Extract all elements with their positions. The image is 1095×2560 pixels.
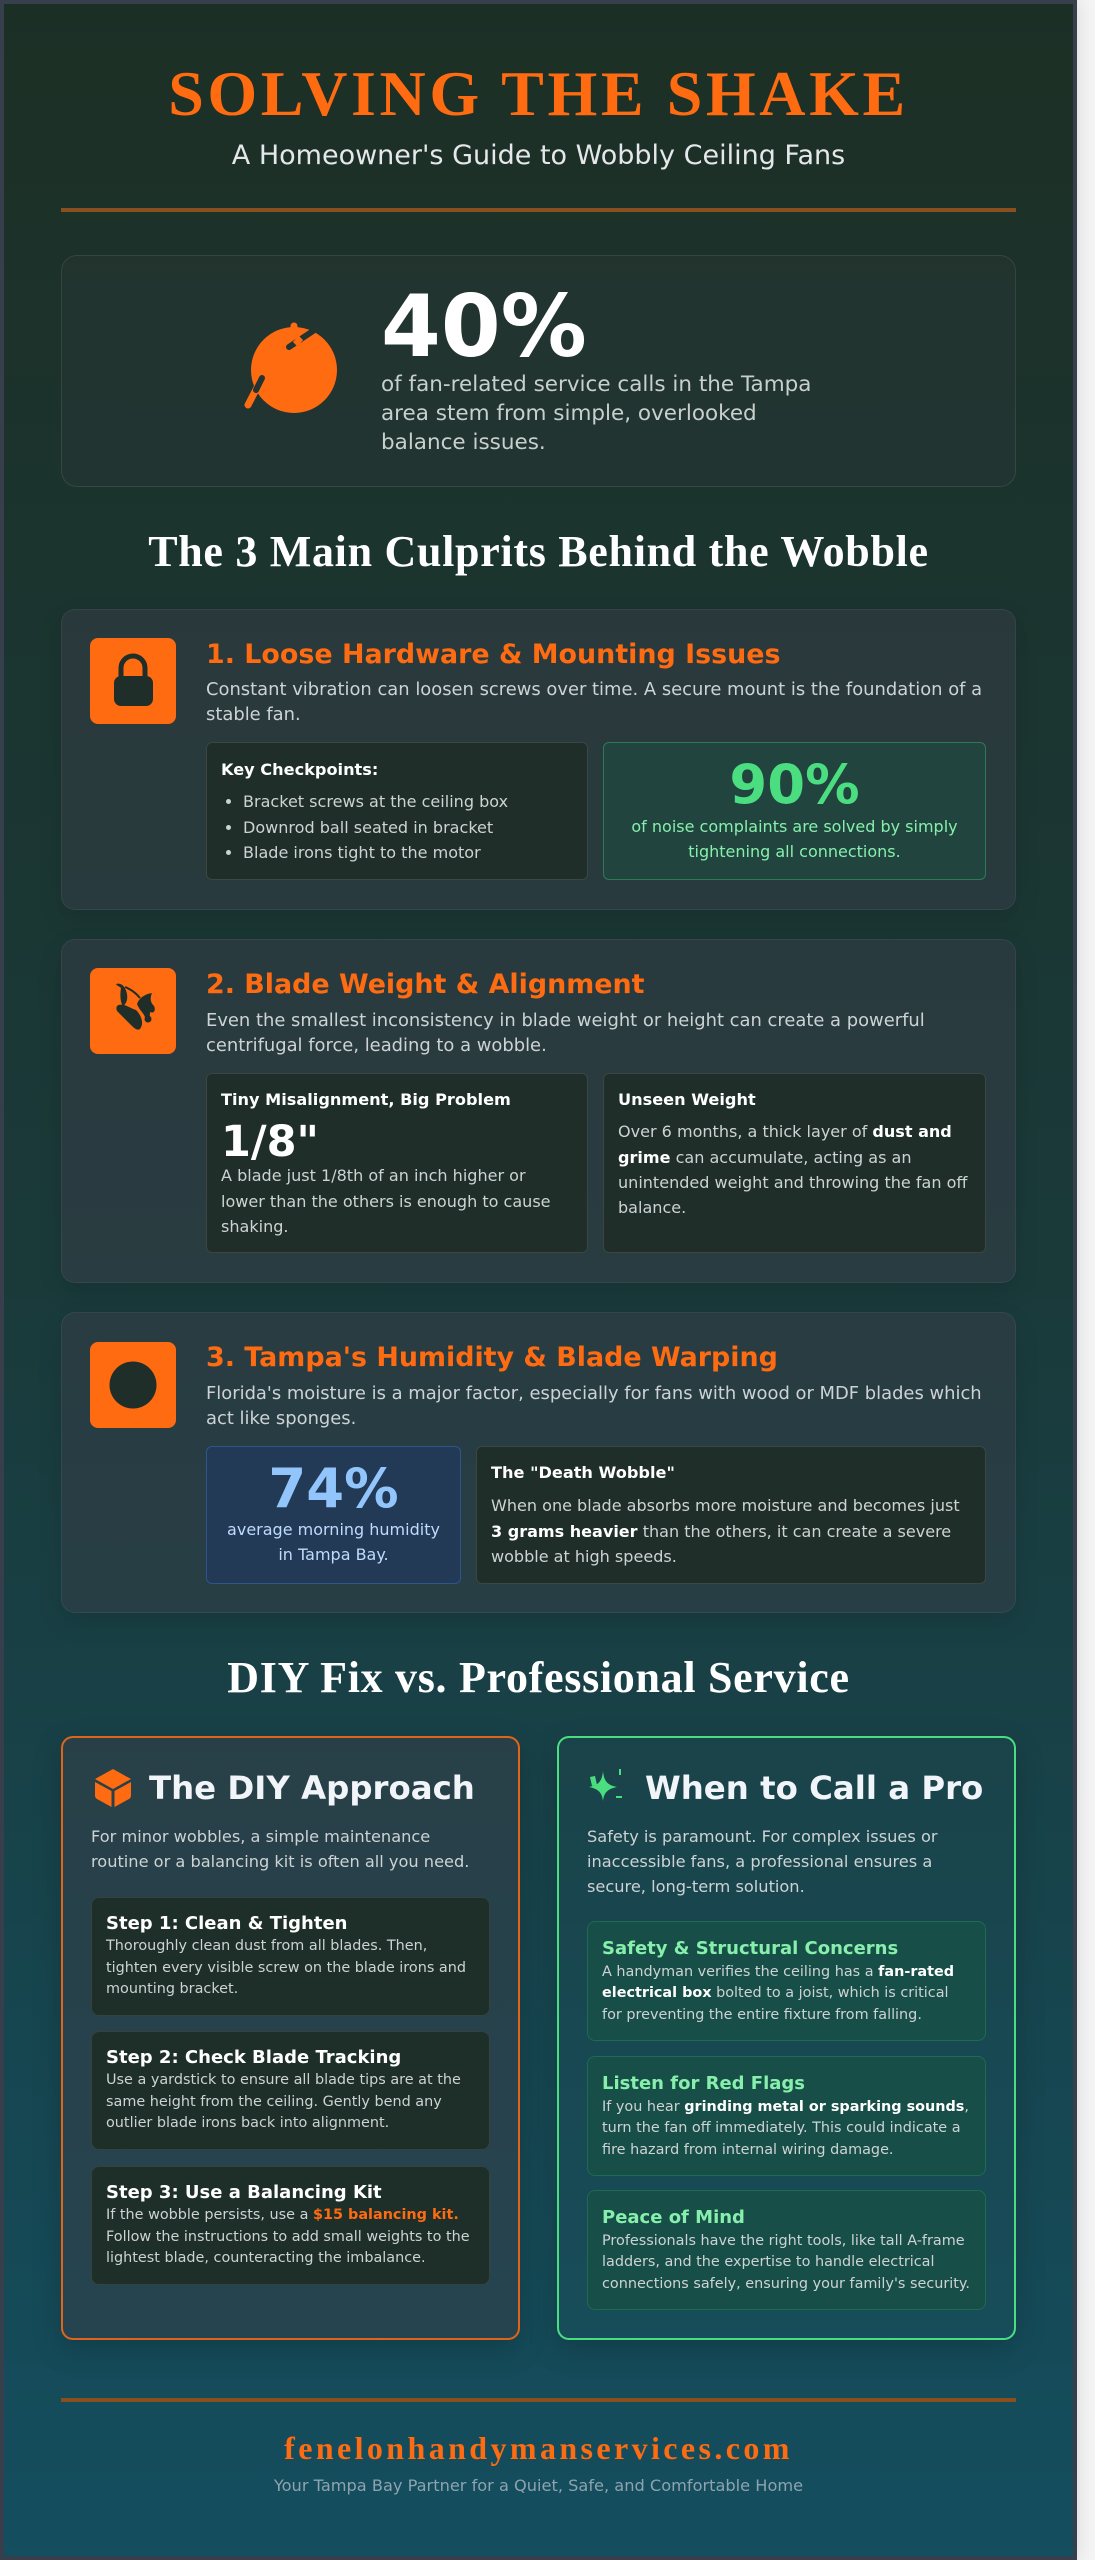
panel: DIY approach <box>61 1736 520 2340</box>
pro intro: secure, long-term solution. <box>587 1876 805 1896</box>
culprit 1 heading: 1. Loose Hardware & Mounting Issues <box>206 639 781 670</box>
footer tagline: Your Tampa Bay Partner for a Quiet, Safe, and Comfortable Home <box>274 2476 803 2495</box>
title: SOLVING THE SHAKE <box>168 58 909 129</box>
culprit 2 description: Even the smallest inconsistency in blade weight or height can create a powerful <box>206 1010 925 1031</box>
checkpoints list: Downrod ball seated in bracket <box>243 818 493 837</box>
red flags title: Listen for Red Flags <box>602 2073 805 2094</box>
box: key checkpoints <box>206 742 588 880</box>
panel: culprit 1 <box>61 609 1016 910</box>
pro heading: When to Call a Pro <box>645 1768 983 1806</box>
box: 90% statistic <box>603 742 986 880</box>
DIY intro <box>91 1826 469 1870</box>
box text: shaking. <box>221 1217 289 1236</box>
box: death wobble <box>476 1446 986 1584</box>
red flags text <box>602 2099 969 2158</box>
step 2 text: Use a yardstick to ensure all blade tips are at the <box>106 2072 461 2088</box>
statistic description: of fan-related service calls in the Tampa <box>381 372 811 397</box>
peace of mind text: connections safely, ensuring your family's security. <box>602 2276 970 2292</box>
icon: sparkle <box>589 1769 622 1801</box>
pro point: peace of mind <box>587 2190 986 2310</box>
step 3 text <box>106 2207 470 2266</box>
statistic description: tightening all connections. <box>688 842 901 861</box>
heading: culprits: The 3 Main Culprits Behind the Wobble <box>148 527 929 576</box>
checkpoints heading: Key Checkpoints: <box>221 760 378 779</box>
step 1 <box>91 1897 490 2016</box>
panel: culprit 3 <box>61 1312 1016 1613</box>
pro point: red flags <box>587 2056 986 2176</box>
statistic: 40%: 40% <box>381 276 587 376</box>
step 3 text: lightest blade, counteracting the imbalance. <box>106 2250 426 2266</box>
checkpoints list: Bracket screws at the ceiling box <box>243 792 508 811</box>
safety text: A handyman verifies the ceiling has a fan-rated <box>602 1964 954 1980</box>
pro intro <box>587 1826 938 1896</box>
box heading: The "Death Wobble" <box>491 1463 675 1482</box>
culprit 3 description <box>206 1383 982 1429</box>
peace of mind title: Peace of Mind <box>602 2207 745 2228</box>
culprit 2 description <box>206 1010 925 1056</box>
statistic description: in Tampa Bay. <box>278 1545 389 1564</box>
icon: fan <box>244 322 337 413</box>
red flags text: If you hear grinding metal or sparking sounds, <box>602 2099 969 2115</box>
statistic description <box>381 372 811 455</box>
box: unseen weight <box>603 1073 986 1253</box>
box text: unintended weight and throwing the fan off <box>618 1173 967 1192</box>
culprit 3 description: act like sponges. <box>206 1408 356 1429</box>
safety text <box>602 1964 954 2023</box>
step 3 text: If the wobble persists, use a $15 balancing kit. <box>106 2207 459 2223</box>
box text: 3 grams heavier than the others, it can create a severe <box>491 1522 951 1541</box>
box heading: Unseen Weight <box>618 1090 756 1109</box>
peace of mind text: Professionals have the right tools, like tall A-frame <box>602 2233 965 2249</box>
statistic: 90%: 90% <box>729 753 860 816</box>
box heading: Tiny Misalignment, Big Problem <box>221 1090 511 1109</box>
statistic: 1/8 inch: 1/8" <box>221 1116 319 1166</box>
panel: hero statistic <box>61 255 1016 487</box>
safety title: Safety & Structural Concerns <box>602 1938 898 1959</box>
red flags text: fire hazard from internal wiring damage. <box>602 2142 894 2158</box>
statistic description: balance issues. <box>381 430 546 455</box>
peace of mind text <box>602 2233 970 2292</box>
step 2 <box>91 2031 490 2150</box>
culprit 3 heading: 3. Tampa's Humidity & Blade Warping <box>206 1342 778 1373</box>
heading: DIY vs pro: DIY Fix vs. Professional Service <box>227 1653 850 1702</box>
box text: When one blade absorbs more moisture and becomes just <box>491 1496 960 1515</box>
box text: balance. <box>618 1198 686 1217</box>
panel: culprit 2 <box>61 939 1016 1283</box>
culprit 1 description <box>206 679 982 725</box>
statistic description: area stem from simple, overlooked <box>381 401 757 426</box>
step 2 title: Step 2: Check Blade Tracking <box>106 2047 401 2068</box>
red flags text: turn the fan off immediately. This could indicate a <box>602 2120 961 2136</box>
box text: grime can accumulate, acting as an <box>618 1148 912 1167</box>
box text: A blade just 1/8th of an inch higher or <box>221 1166 526 1185</box>
step 3 <box>91 2166 490 2285</box>
box text: lower than the others is enough to cause <box>221 1192 551 1211</box>
box text: wobble at high speeds. <box>491 1547 677 1566</box>
step 1 text <box>106 1938 466 1997</box>
step 1 text: mounting bracket. <box>106 1981 238 1997</box>
box: tiny misalignment <box>206 1073 588 1253</box>
step 2 text <box>106 2072 461 2131</box>
statistic description <box>631 816 958 861</box>
step 1 text: Thoroughly clean dust from all blades. Then, <box>106 1938 427 1954</box>
culprit 3 description: Florida's moisture is a major factor, especially for fans with wood or MDF blades which <box>206 1383 982 1404</box>
culprit 1 description: Constant vibration can loosen screws over time. A secure mount is the foundation of a <box>206 679 982 700</box>
pro intro: Safety is paramount. For complex issues or <box>587 1826 938 1846</box>
icon: cube <box>95 1769 131 1807</box>
step 1 text: tighten every visible screw on the blade irons and <box>106 1960 466 1976</box>
culprit 1 description: stable fan. <box>206 704 301 725</box>
safety text: electrical box bolted to a joist, which is critical <box>602 1985 949 2001</box>
step 3 title: Step 3: Use a Balancing Kit <box>106 2182 382 2203</box>
box text <box>618 1122 968 1217</box>
subtitle: A Homeowner's Guide to Wobbly Ceiling Fans <box>232 140 845 171</box>
statistic: 74%: 74% <box>268 1457 399 1520</box>
DIY intro: routine or a balancing kit is often all you need. <box>91 1852 469 1870</box>
step 2 text: same height from the ceiling. Gently bend any <box>106 2094 442 2110</box>
culprit 2 heading: 2. Blade Weight & Alignment <box>206 969 644 1000</box>
pro point: safety <box>587 1921 986 2041</box>
panel: call a pro <box>557 1736 1016 2340</box>
DIY intro: For minor wobbles, a simple maintenance <box>91 1826 430 1846</box>
statistic description: average morning humidity <box>227 1520 440 1538</box>
icon: water drop <box>90 1342 176 1428</box>
culprit 2 description: centrifugal force, leading to a wobble. <box>206 1035 547 1056</box>
peace of mind text: ladders, and the expertise to handle electrical <box>602 2254 934 2270</box>
icon: lock <box>90 638 176 724</box>
statistic description <box>227 1520 440 1564</box>
step 2 text: outlier blade irons back into alignment. <box>106 2115 389 2131</box>
box: 74% statistic <box>206 1446 461 1584</box>
footer website: fenelonhandymanservices.com <box>284 2430 793 2466</box>
box text <box>491 1496 960 1566</box>
box text <box>221 1166 551 1236</box>
step 1 title: Step 1: Clean & Tighten <box>106 1913 347 1934</box>
step 3 text: Follow the instructions to add small weights to the <box>106 2229 470 2245</box>
checkpoints list: Blade irons tight to the motor <box>243 843 481 862</box>
pro intro: inaccessible fans, a professional ensures a <box>587 1852 932 1870</box>
DIY heading: The DIY Approach <box>149 1768 475 1806</box>
checkpoints list <box>226 792 508 862</box>
box text: Over 6 months, a thick layer of dust and <box>618 1122 952 1141</box>
statistic description: of noise complaints are solved by simply <box>631 816 958 836</box>
safety text: for preventing the entire fixture from falling. <box>602 2007 922 2023</box>
icon: fan blade <box>90 968 176 1054</box>
